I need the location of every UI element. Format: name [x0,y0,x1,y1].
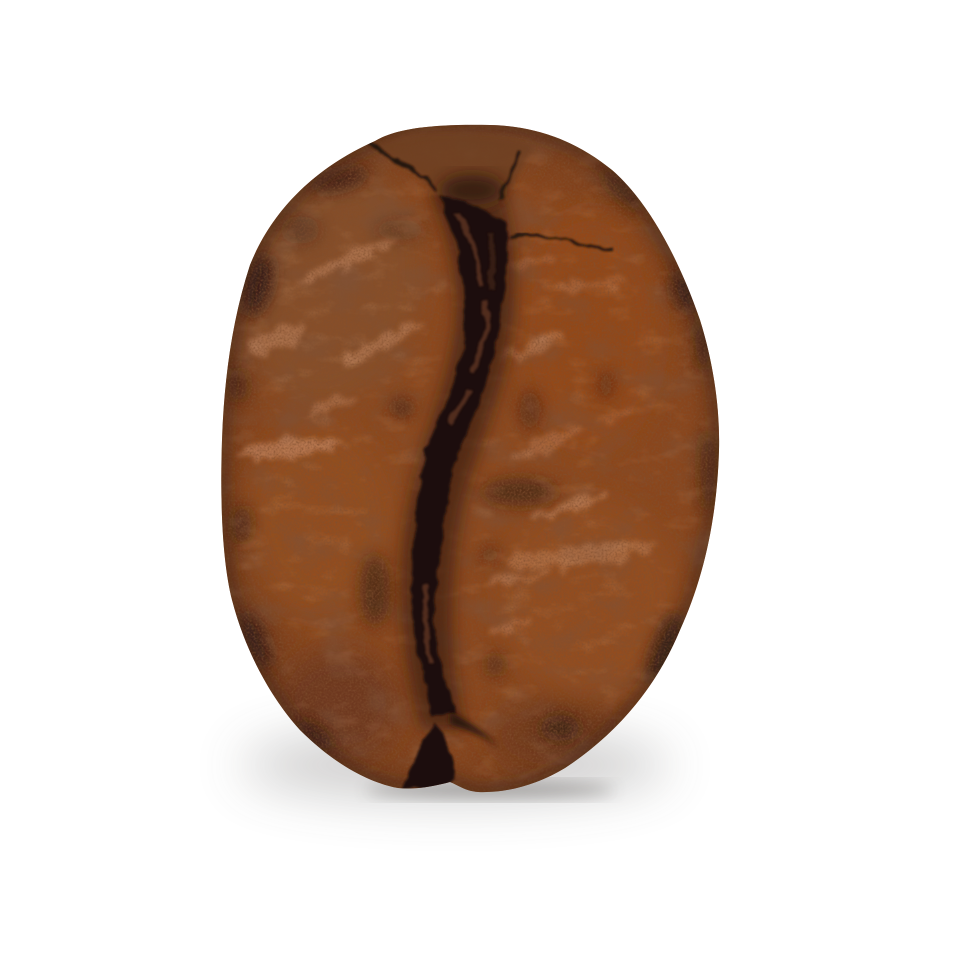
hairline crack [508,236,612,250]
mottled dark texture [221,142,709,786]
top edge creases [370,142,518,200]
crease: central fold [412,195,507,715]
glossy highlights [239,235,661,636]
dark scorch marks [229,164,716,755]
crease: top dimple [388,134,531,212]
tonal patches [222,130,680,775]
edge shading [221,125,719,792]
crease: inner ridges [425,212,494,665]
ground shadow [240,731,670,799]
base colour [221,124,720,792]
illustration: coffee bean [221,124,720,824]
bean body [221,124,720,792]
crease shading [401,190,514,730]
surface grain [221,124,719,792]
mottled highlights [222,155,718,779]
bottom cleft [402,722,456,788]
